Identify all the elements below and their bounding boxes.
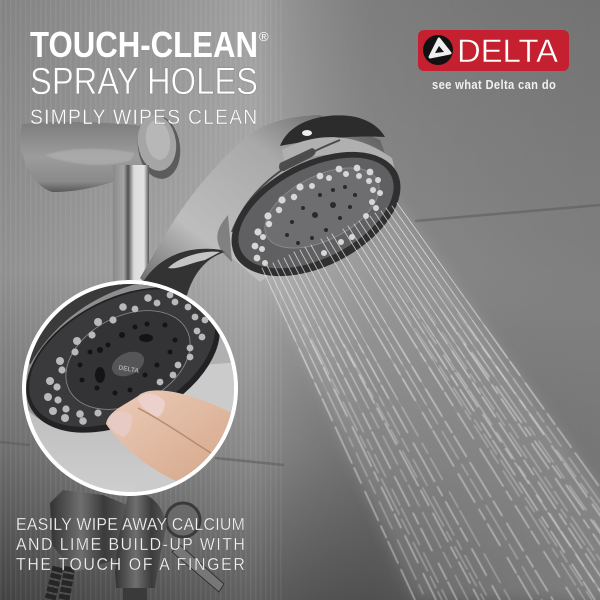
hose xyxy=(50,567,70,600)
body text: THE TOUCH OF A FINGER xyxy=(16,554,245,574)
title: Touch-Clean: TOUCH-CLEAN xyxy=(30,24,258,65)
tagline: see what Delta can do xyxy=(432,77,556,92)
outer nozzles xyxy=(252,165,383,266)
inset head rim xyxy=(26,284,218,420)
subtitle: SIMPLY WIPES CLEAN xyxy=(30,106,257,129)
body text xyxy=(16,514,245,574)
icon: Delta emblem xyxy=(423,35,453,65)
icon: wall mount holder xyxy=(20,112,184,192)
lever xyxy=(172,545,224,592)
knob xyxy=(134,112,184,182)
logo: Delta xyxy=(418,30,569,71)
chrome top xyxy=(280,115,385,146)
icon: vertical slide bar xyxy=(113,165,149,290)
knob ring xyxy=(166,503,200,537)
inset fingers xyxy=(106,390,240,482)
wordmark: DELTA xyxy=(457,33,559,69)
inner holes xyxy=(285,185,357,245)
panel: circular inset of finger wiping spray head xyxy=(22,280,238,496)
center body xyxy=(115,493,167,588)
spray haze xyxy=(262,203,600,600)
body text: EASILY WIPE AWAY CALCIUM xyxy=(16,514,245,534)
handle xyxy=(140,115,395,305)
water spray xyxy=(262,203,600,600)
title: Spray Holes: SPRAY HOLES xyxy=(30,61,258,103)
registered mark: ® xyxy=(259,29,269,44)
icon: shower head xyxy=(140,115,421,305)
icon: wall connector and hose xyxy=(50,490,224,600)
bracket xyxy=(50,490,127,572)
body text: AND LIME BUILD-UP WITH xyxy=(16,534,245,554)
inset center logo xyxy=(112,352,144,376)
inset nozzles xyxy=(44,292,208,425)
inset face xyxy=(26,288,220,433)
inset holes xyxy=(78,322,178,396)
rim xyxy=(211,126,421,302)
panel: circular inset of finger wiping spray head: DELTA xyxy=(118,364,140,375)
